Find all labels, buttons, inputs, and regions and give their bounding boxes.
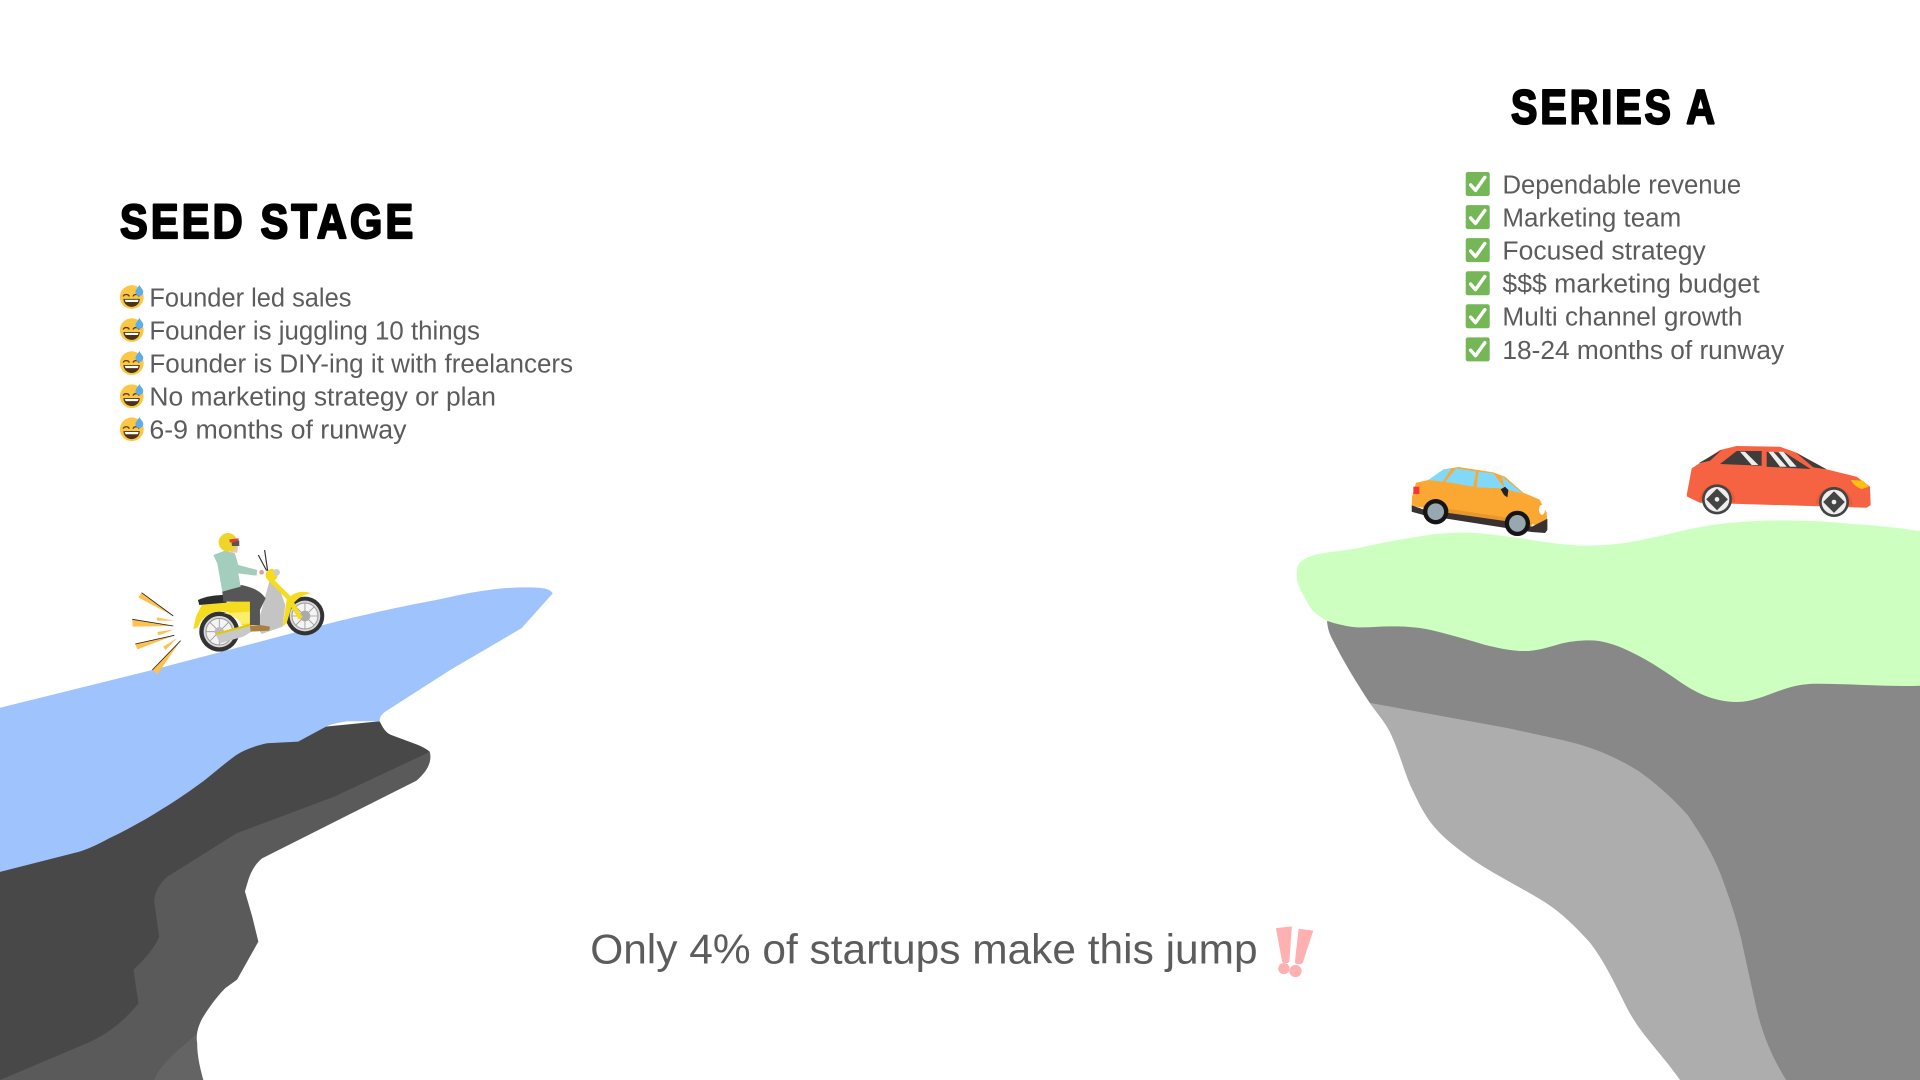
red car front wheel	[1819, 487, 1849, 517]
icon: check row 4	[1466, 271, 1490, 295]
red car window glints	[1740, 452, 1797, 467]
series a list	[1466, 171, 1784, 365]
orange car lower band	[1412, 505, 1547, 533]
orange car rear light	[1413, 487, 1419, 494]
rider torso and arm	[213, 551, 257, 592]
icon: sweat smile row 3	[120, 351, 144, 375]
orange car mirror	[1501, 487, 1508, 497]
icon: orange car	[1412, 467, 1547, 536]
right cliff: green top surface	[1297, 520, 1920, 702]
scooter body highlight	[223, 612, 250, 624]
left cliff: blue top surface	[0, 587, 553, 872]
left cliff: lighter lower facet	[154, 1035, 203, 1080]
icon: sweat smile row 2	[120, 318, 144, 342]
handlebar and mirrors	[258, 550, 268, 571]
icon: check row 3	[1466, 238, 1490, 262]
speed lines	[132, 593, 181, 674]
icon: sweat smile row 1	[120, 285, 144, 309]
orange car front wheel	[1505, 511, 1530, 536]
rear wheel	[199, 612, 239, 652]
text: freelancers: Founder is DIY-ing it with freelancers	[149, 351, 573, 379]
text: short runway: 6-9 months of runway	[149, 417, 407, 445]
icon: scooter rider with speed lines	[132, 533, 324, 674]
headlight	[266, 569, 278, 581]
text: dependable revenue: Dependable revenue	[1502, 171, 1741, 199]
front wheel	[286, 597, 324, 635]
orange car windows	[1428, 468, 1523, 493]
seed stage list	[120, 284, 573, 445]
icon: check row 2	[1466, 205, 1490, 229]
left cliff: dark grey rock	[0, 721, 430, 1080]
seat	[198, 595, 227, 605]
scooter front fender	[283, 592, 311, 627]
scooter rear body	[193, 600, 252, 629]
visor	[229, 538, 239, 543]
scooter exhaust	[216, 625, 252, 643]
scooter front frame	[269, 578, 301, 618]
rider shoe	[250, 625, 270, 632]
title: seed stage: SEED STAGE	[120, 196, 416, 249]
rider hand	[259, 570, 264, 575]
left cliff: mid grey rock face	[0, 752, 430, 1080]
icon: sweat smile row 5	[120, 417, 144, 441]
icon: check row 5	[1466, 304, 1490, 328]
rider face	[230, 543, 238, 553]
rider pants	[222, 585, 266, 625]
red car side windows	[1698, 450, 1827, 469]
icon: pink double exclamation	[1276, 926, 1313, 977]
orange car rear wheel	[1423, 499, 1448, 524]
red car wheel arches	[1699, 484, 1853, 505]
text: long runway: 18-24 months of runway	[1502, 337, 1784, 365]
callout: only 4% make this jump: Only 4% of startups make this jump	[590, 926, 1258, 973]
right cliff: light grey rock	[1370, 703, 1786, 1080]
title: series a: SERIES A	[1511, 82, 1718, 135]
icon: check row 6	[1466, 337, 1490, 361]
left cliff	[0, 587, 553, 1080]
icon: red car	[1687, 446, 1871, 517]
icon: sweat smile row 4	[120, 384, 144, 408]
red car headlight	[1851, 480, 1869, 489]
text: marketing budget: $$$ marketing budget	[1502, 271, 1760, 299]
red car rear wheel	[1702, 484, 1732, 514]
helmet	[219, 533, 237, 552]
scooter leg shield	[257, 582, 285, 634]
text: marketing team: Marketing team	[1502, 205, 1681, 233]
right cliff	[1297, 520, 1920, 1080]
orange car headlight	[1539, 505, 1545, 515]
text: multi channel: Multi channel growth	[1502, 304, 1742, 332]
text: no strategy: No marketing strategy or plan	[149, 384, 496, 412]
red car body	[1687, 446, 1871, 508]
text: juggling: Founder is juggling 10 things	[149, 318, 480, 346]
text: focused strategy: Focused strategy	[1502, 238, 1706, 266]
right cliff: dark grey rock	[1327, 576, 1920, 1080]
orange car darker stripe	[1423, 505, 1532, 527]
text: founder led sales: Founder led sales	[149, 284, 351, 312]
icon: check row 1	[1466, 172, 1490, 196]
orange car body	[1412, 467, 1547, 527]
